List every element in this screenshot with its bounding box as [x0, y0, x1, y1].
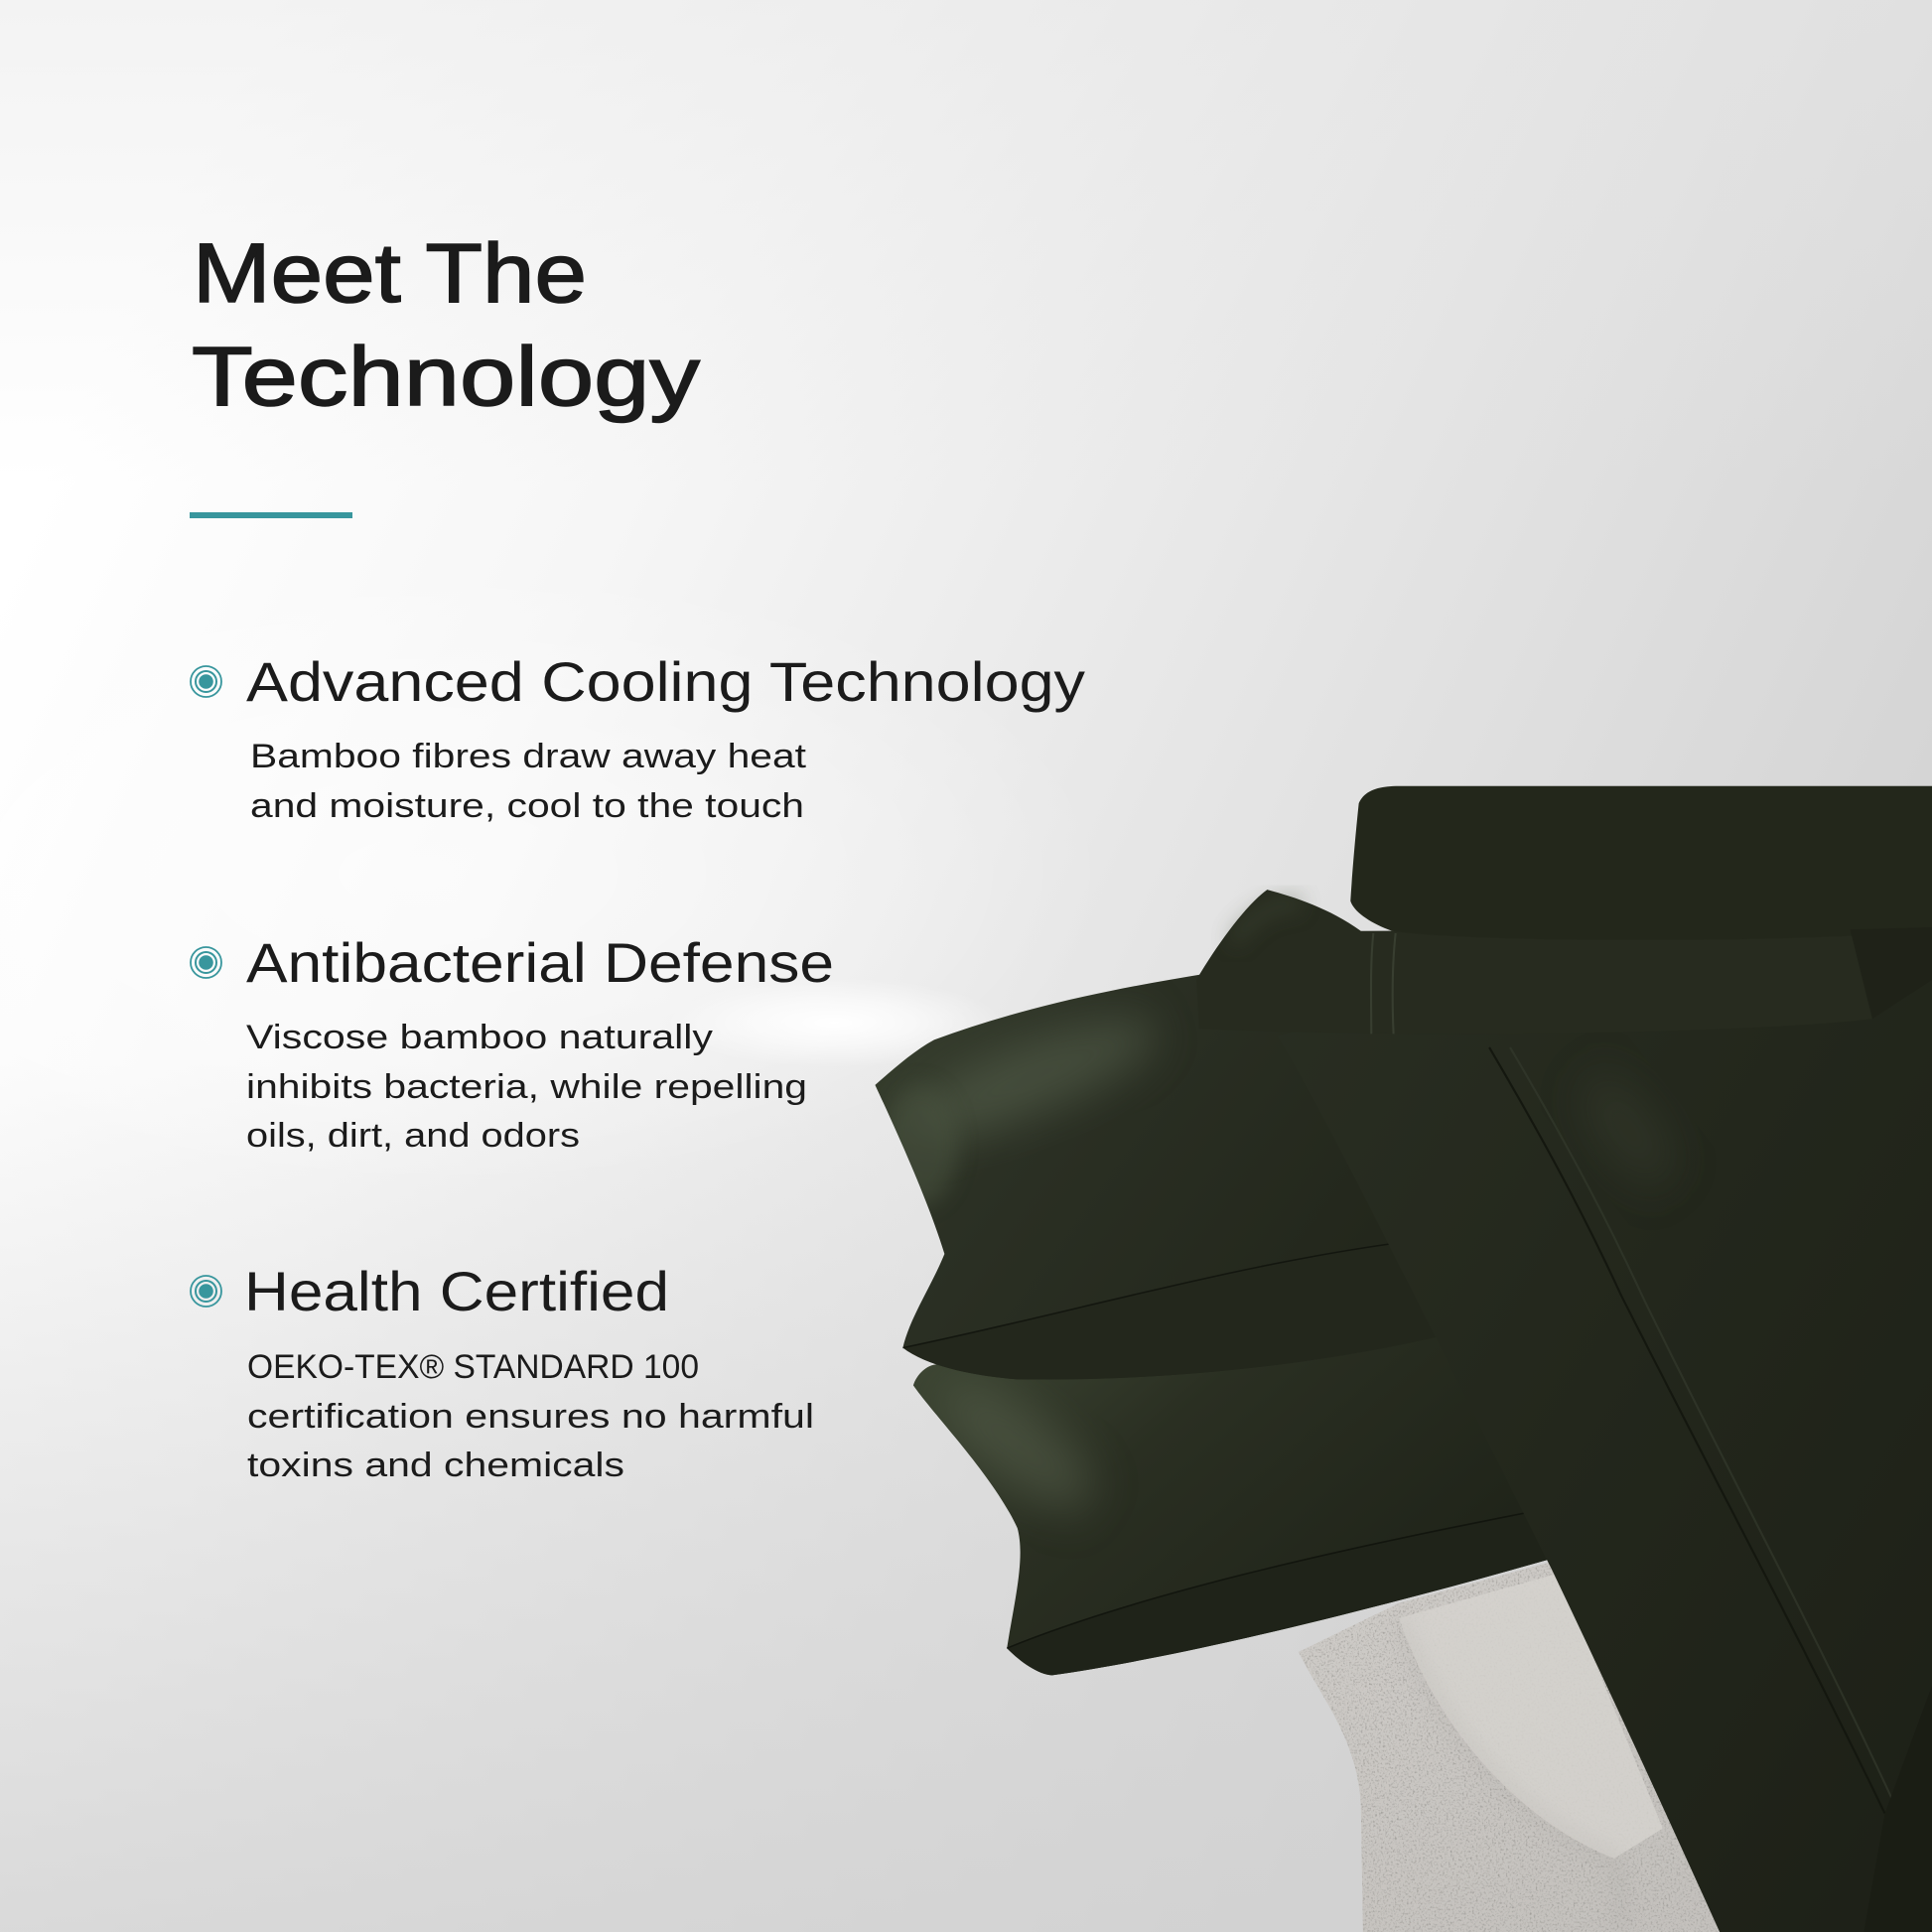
- title: [192, 226, 700, 423]
- description: oils, dirt, and odors: [246, 1117, 580, 1155]
- feature: advanced cooling technology: [191, 650, 1085, 825]
- stone bust: [1299, 1562, 1725, 1932]
- icon: concentric teal bullet: [191, 947, 221, 978]
- title: Technology: [192, 330, 700, 423]
- feature: antibacterial defense: [191, 931, 834, 1155]
- folded pillowcase: [1196, 890, 1872, 1034]
- description: and moisture, cool to the touch: [250, 787, 804, 825]
- description: [247, 1348, 814, 1484]
- upper pillow: [875, 974, 1468, 1380]
- draped sheet: [1278, 799, 1932, 1932]
- description: inhibits bacteria, while repelling: [246, 1068, 807, 1106]
- heading: Advanced Cooling Technology: [246, 650, 1085, 713]
- product photo: folded bamboo sheets and pillows on a stone bust: [875, 786, 1932, 1932]
- lower pillow: [913, 1332, 1580, 1675]
- icon: concentric teal bullet: [191, 1276, 221, 1307]
- feature: health certified: [191, 1260, 814, 1484]
- description: Bamboo fibres draw away heat: [250, 738, 807, 775]
- folded sheet stack: [1350, 786, 1932, 1019]
- title accent rule: [190, 512, 352, 518]
- heading: Health Certified: [244, 1260, 669, 1322]
- title: Meet The: [193, 226, 587, 320]
- heading: Antibacterial Defense: [246, 931, 834, 994]
- description: Viscose bamboo naturally: [246, 1019, 713, 1056]
- description: [246, 1019, 807, 1155]
- description: certification ensures no harmful: [247, 1398, 814, 1436]
- icon: concentric teal bullet: [191, 666, 221, 697]
- description: [250, 738, 807, 825]
- description: OEKO-TEX® STANDARD 100: [247, 1348, 699, 1386]
- description: toxins and chemicals: [247, 1447, 624, 1484]
